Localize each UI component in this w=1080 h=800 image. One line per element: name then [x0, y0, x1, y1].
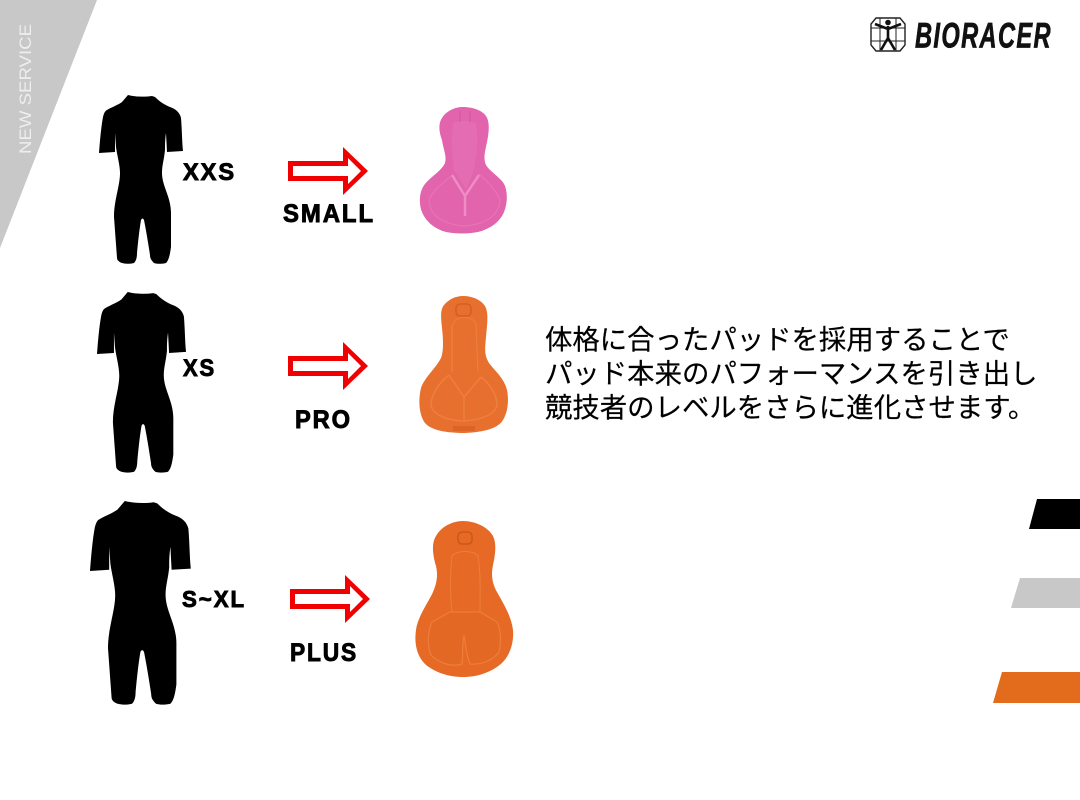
silhouette: XXS suit [99, 95, 183, 264]
text block: description: 体格に合ったパッドを採用することで [545, 324, 1010, 355]
size label: XXS: XXS [183, 159, 236, 186]
pad: plus orange [415, 521, 513, 677]
silhouette: S~XL suit [90, 501, 191, 705]
stripe: grey [1011, 578, 1080, 608]
row: XS to PRO [97, 292, 508, 473]
text block: description: パッド本来のパフォーマンスを引き出し [545, 358, 1038, 389]
silhouette: XS suit [97, 292, 186, 473]
pad: orange [419, 296, 508, 433]
icon: Vitruvian globe [871, 18, 905, 51]
stripe: orange [993, 672, 1080, 703]
size label: XS: XS [183, 355, 216, 382]
pad: pink [420, 107, 507, 234]
pad label: SMALL: SMALL [283, 200, 375, 228]
stripe: black [1029, 499, 1080, 529]
size label: S~XL: S~XL [182, 586, 246, 612]
corner banner [0, 0, 97, 248]
text block: description [545, 324, 1038, 423]
pad label: PLUS: PLUS [290, 639, 358, 667]
text block: description: 競技者のレベルをさらに進化させます。 [545, 392, 1035, 423]
row: XXS to SMALL [99, 95, 507, 264]
row: S~XL to PLUS [90, 501, 513, 705]
arrow: red outline [288, 342, 368, 390]
pad label: PRO: PRO [295, 406, 352, 434]
logo: BIORACER [871, 16, 1052, 56]
banner label: NEW SERVICE: NEW SERVICE [17, 24, 35, 154]
arrow: red outline [288, 147, 368, 195]
arrow: red outline [290, 575, 370, 623]
